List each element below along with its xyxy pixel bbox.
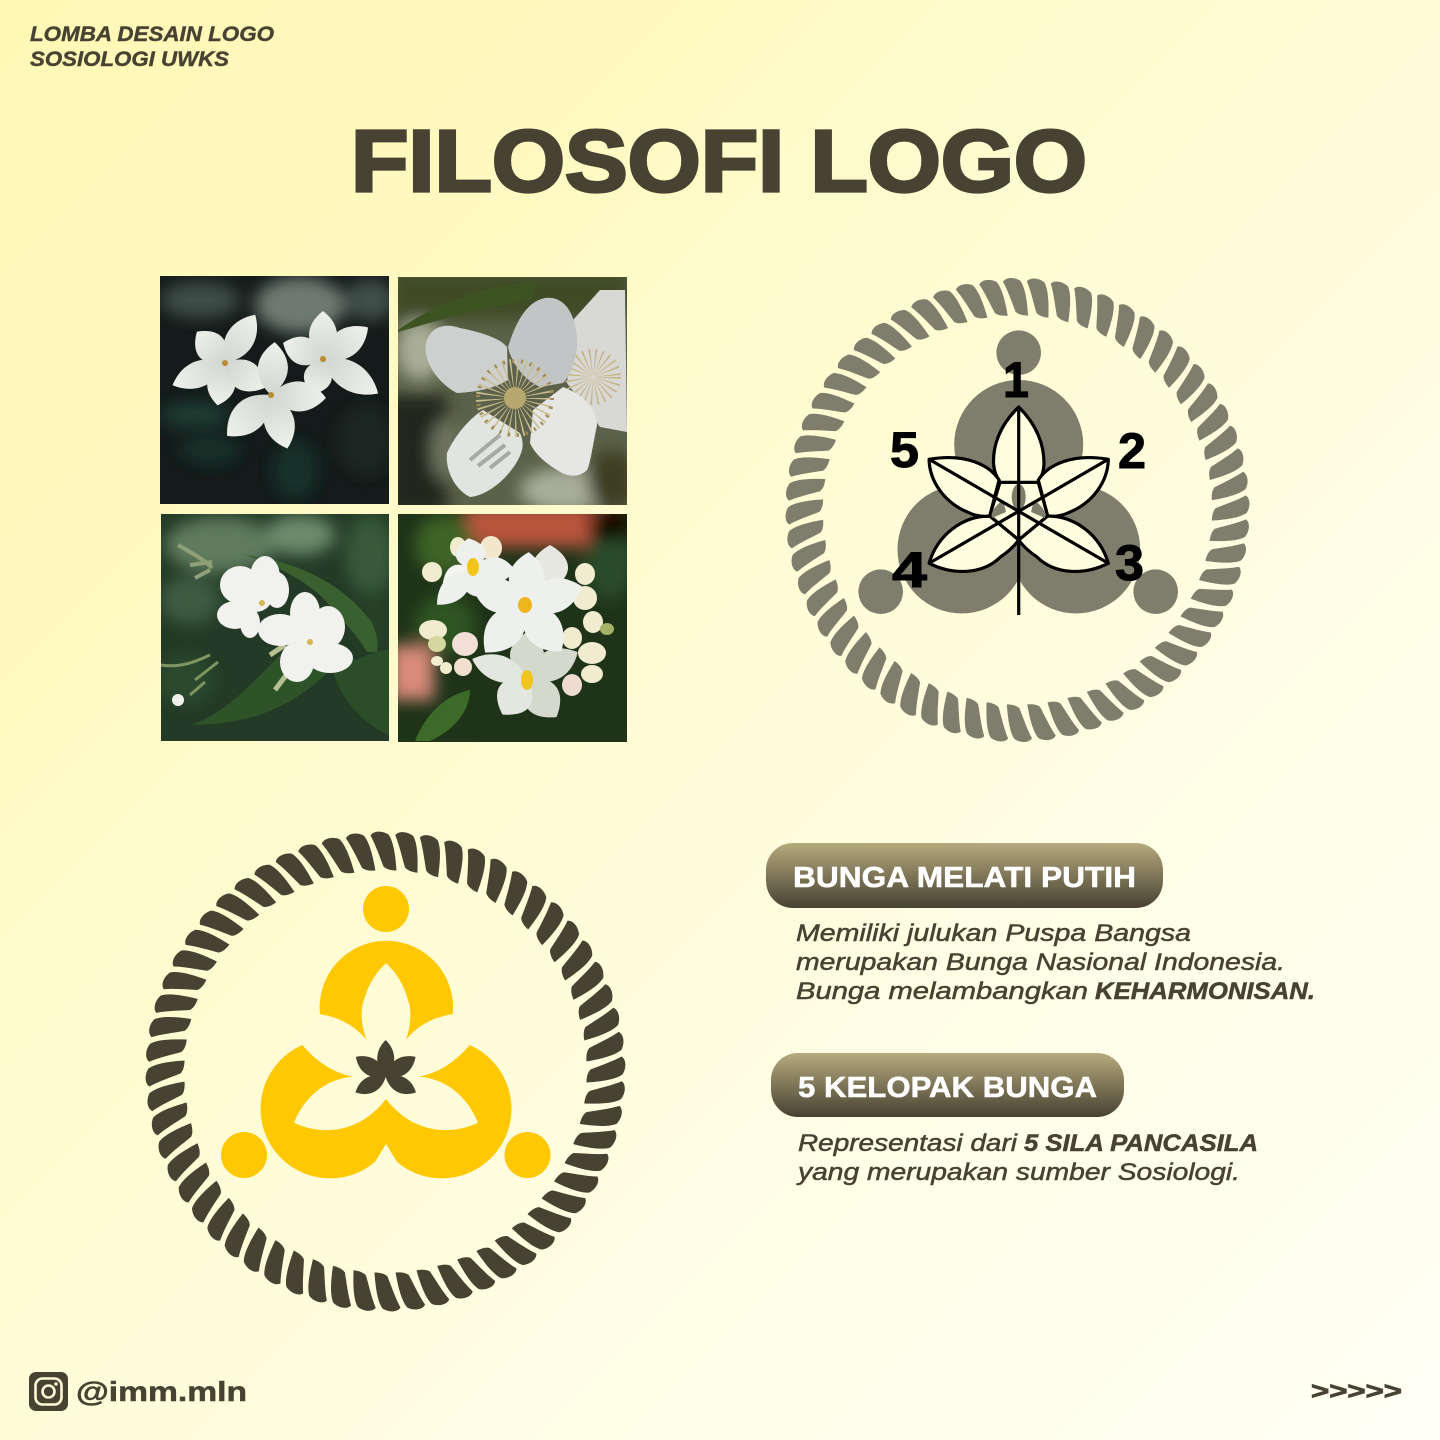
photo: large white mock-orange blossom xyxy=(398,277,627,505)
text: kelopak description: yang merupakan sumber Sosiologi. xyxy=(796,1159,1240,1186)
petal numbers: 3 xyxy=(1115,535,1144,591)
rope ring: dark xyxy=(145,831,626,1312)
centre guide shapes xyxy=(992,484,1045,518)
guide circles xyxy=(858,330,1178,614)
petal numbers: 4 xyxy=(892,542,927,598)
text: melati description: Memiliki julukan Puspa Bangsa xyxy=(796,920,1191,947)
text: kelopak description: Representasi dari xyxy=(798,1130,1018,1157)
text: melati description: Bunga melambangkan xyxy=(796,978,1088,1005)
text: melati description: KEHARMONISAN. xyxy=(1095,978,1315,1005)
rope ring: grey xyxy=(785,278,1250,742)
yellow dots xyxy=(221,886,550,1178)
petal numbers xyxy=(890,352,1146,598)
logo construction diagram xyxy=(785,278,1250,742)
heading pill: Bunga Melati Putih: BUNGA MELATI PUTIH xyxy=(793,862,1136,894)
text: kelopak description: 5 SILA PANCASILA xyxy=(1024,1130,1258,1157)
text: melati description xyxy=(796,920,1315,1005)
photo: jasmine nightshade cluster with buds xyxy=(398,514,627,742)
outlined petals xyxy=(929,407,1108,571)
yellow top petal shape xyxy=(320,941,453,1040)
yellow lower petals shape xyxy=(261,1045,511,1178)
petal numbers: 1 xyxy=(1003,352,1029,408)
header label xyxy=(30,23,274,71)
heading pill: 5 Kelopak Bunga xyxy=(771,1053,1124,1117)
axis lines xyxy=(929,407,1108,615)
photo: three star jasmine on dark foliage xyxy=(160,276,395,504)
icon: instagram xyxy=(29,1372,68,1411)
final logo xyxy=(145,831,626,1312)
text: kelopak description xyxy=(796,1130,1258,1186)
petal numbers: 2 xyxy=(1118,423,1146,479)
social handle: @imm.mln xyxy=(76,1376,247,1407)
big leaf xyxy=(245,555,377,652)
header label: LOMBA DESAIN LOGO xyxy=(30,23,274,46)
header label: SOSIOLOGI UWKS xyxy=(30,48,229,71)
photo: white jasmine with green leaves xyxy=(155,514,395,741)
dark five-petal flower xyxy=(351,1040,420,1100)
heading pill: Bunga Melati Putih xyxy=(766,843,1163,908)
text: melati description: merupakan Bunga Nasional Indonesia. xyxy=(796,949,1285,976)
petal numbers: 5 xyxy=(890,422,919,478)
heading pill: 5 Kelopak Bunga: 5 KELOPAK BUNGA xyxy=(798,1072,1097,1104)
title: FILOSOFI LOGO xyxy=(351,113,1087,210)
next arrows: >>>>> xyxy=(1311,1378,1402,1405)
